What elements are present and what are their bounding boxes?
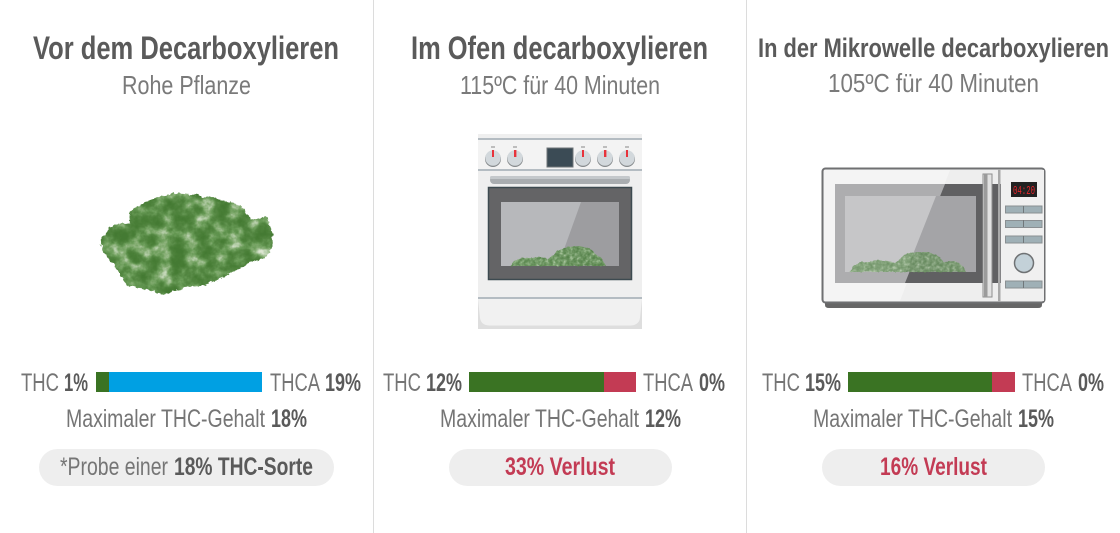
label: THC 1%: THC	[21, 369, 59, 397]
label: THCA 0%: 0%	[699, 369, 725, 397]
heading: Vor dem Decarboxylieren: Vor dem Decarboxylieren	[33, 30, 339, 66]
divider lines	[373, 0, 747, 533]
subheading: Rohe Pflanze: Rohe Pflanze	[122, 70, 251, 100]
label: THC 15%: 15%	[805, 369, 841, 397]
text: maximum THC content 12%: 12%	[645, 405, 681, 433]
icon: raw cannabis bud	[100, 193, 273, 295]
label: THCA 0%: THCA	[643, 369, 693, 397]
callout: 33% loss	[449, 449, 672, 486]
panel: microwave decarboxylation	[758, 33, 1109, 486]
stacked bar: THC vs loss	[848, 372, 1015, 392]
panel: before decarboxylation	[21, 30, 361, 486]
label: THC 1%: 1%	[64, 369, 88, 397]
label: THC 15%: THC	[762, 369, 800, 397]
label: THCA 19%: THCA	[270, 369, 320, 397]
icon: oven	[478, 134, 642, 329]
label: THCA 0%: 0%	[1078, 369, 1104, 397]
text: maximum THC content 15%: Maximaler THC-Gehalt	[813, 405, 1012, 433]
panel: oven decarboxylation	[383, 30, 725, 486]
text: maximum THC content 18%: Maximaler THC-Gehalt	[66, 405, 265, 433]
label: THC 12%: 12%	[426, 369, 462, 397]
callout: 33% loss: 33% Verlust	[505, 453, 616, 481]
text: maximum THC content 15%: 15%	[1018, 405, 1054, 433]
stacked bar: THC vs THCA	[96, 372, 262, 392]
THC bar row	[762, 369, 1104, 397]
label: THC 15%	[762, 369, 841, 397]
label: THC 12%: THC	[383, 369, 421, 397]
heading: Im Ofen decarboxylieren: Im Ofen decarboxylieren	[411, 30, 708, 66]
text: maximum THC content 12%: Maximaler THC-Gehalt	[440, 405, 639, 433]
callout: sample note: 18% THC-Sorte	[174, 453, 313, 481]
subheading: microwave temperature and time: 105ºC für 40 Minuten	[828, 68, 1039, 98]
icon: microwave: 04:20	[1013, 184, 1035, 198]
callout: sample note	[39, 449, 334, 486]
THC bar row	[383, 369, 725, 397]
label: THCA 19%: 19%	[325, 369, 361, 397]
label: THCA 0%: THCA	[1022, 369, 1072, 397]
icon: bud inside oven	[510, 246, 606, 266]
callout: 16% loss: 16% Verlust	[880, 453, 988, 481]
icon: microwave	[822, 168, 1044, 308]
callout: 16% loss	[822, 449, 1045, 486]
label: THC 12%	[383, 369, 462, 397]
icon: bud inside microwave	[850, 252, 966, 272]
stacked bar: THC vs loss	[469, 372, 636, 392]
subheading: oven temperature and time: 115ºC für 40 Minuten	[460, 70, 660, 100]
text: maximum THC content 18%: 18%	[271, 405, 307, 433]
THC bar row	[21, 369, 361, 397]
callout: sample note: *Probe einer	[60, 453, 168, 481]
